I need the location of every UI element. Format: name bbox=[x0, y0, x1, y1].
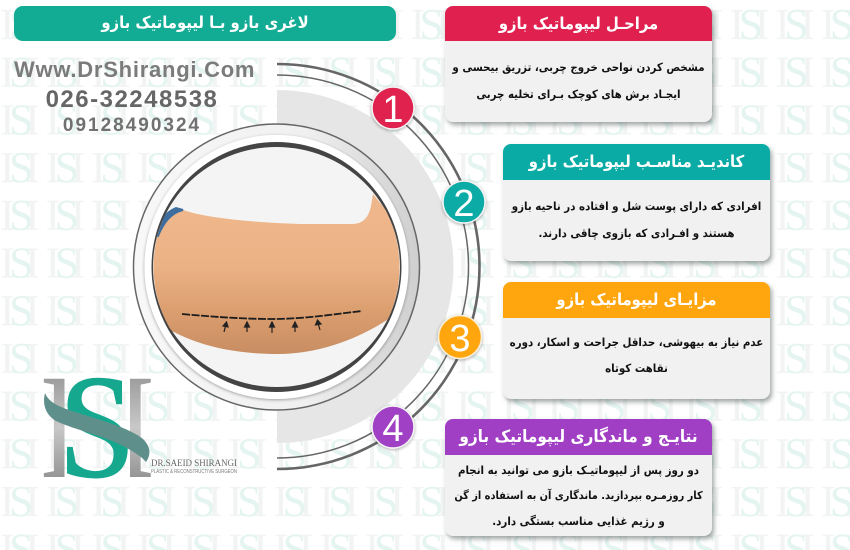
mobile phone: 09128490324 bbox=[63, 115, 201, 136]
grey half circle bbox=[277, 90, 453, 443]
logo bbox=[44, 378, 237, 478]
panel: step 4 bbox=[445, 419, 712, 536]
heading: step 4 bbox=[445, 419, 712, 455]
text: step 1 line 2: ایجـاد برش های کوچک بـرای تخلیه چربی bbox=[476, 87, 681, 101]
logo: I bbox=[40, 344, 79, 510]
badge 3 bbox=[438, 316, 482, 360]
small arrows bbox=[223, 320, 321, 333]
heading: step 2 bbox=[503, 144, 770, 180]
website address: Www.DrShirangi.Com bbox=[14, 57, 255, 82]
text: step 4 line 3: و رژیم غذایی مناسب بستگی دارد. bbox=[492, 514, 665, 528]
badge 4 bbox=[372, 406, 414, 450]
badge 1 bbox=[372, 87, 414, 131]
text: step 1 line 1: مشخص کردن نواحی خروج چربی، تزریق بیحسی و bbox=[452, 60, 705, 74]
logo: S bbox=[60, 343, 133, 510]
heading: step 3: مزایـای لیپوماتیک بازو bbox=[556, 290, 717, 309]
heading: step 2: کاندیـد مناسـب لیپوماتیک بازو bbox=[529, 152, 744, 171]
heading: step 1 bbox=[445, 6, 712, 41]
panel: step 1 bbox=[445, 6, 712, 122]
title bar bbox=[14, 6, 396, 41]
title bar: لاغری بازو بـا لیپوماتیک بازو bbox=[101, 13, 309, 32]
logo caption: DR.SAEID SHIRANGI bbox=[151, 459, 237, 469]
landline phone: 026-32248538 bbox=[46, 86, 218, 113]
heading: step 1: مراحـل لیپوماتیک بازو bbox=[499, 14, 658, 33]
badge 1: 1 bbox=[382, 89, 404, 131]
incision dashed line bbox=[182, 311, 362, 319]
text: step 2 line 1: افرادی که دارای پوست شل و افتاده در ناحیه بازو bbox=[512, 199, 761, 213]
heading: step 3 bbox=[503, 282, 770, 318]
badge 2 bbox=[443, 181, 485, 225]
heading: step 4: نتایـج و ماندگاری لیپوماتیک بازو bbox=[459, 427, 698, 447]
panel: step 3 bbox=[503, 282, 770, 399]
text: step 4 line 2: کار روزمـره بپردازید. ماندگاری آن به استفاده از گن bbox=[454, 489, 703, 502]
outer arcs bbox=[277, 64, 480, 469]
photo circle bbox=[134, 124, 420, 410]
text: step 2 line 2: هستند و افـرادی که بازوی چاقی دارند. bbox=[538, 226, 734, 240]
text: step 4 line 1: دو روز پس از لیپوماتیـک بازو می توانید به انجام bbox=[458, 463, 699, 477]
logo: PLASTIC & RECONSTRUCTIVE SURGEON bbox=[151, 469, 237, 475]
badge 2: 2 bbox=[453, 183, 475, 225]
panel: step 2 bbox=[503, 144, 770, 261]
text: step 3 line 2: نقاهت کوتاه bbox=[605, 361, 668, 375]
badge 3: 3 bbox=[449, 318, 471, 360]
text: step 3 line 1: عدم نیاز به بیهوشی، حداقل جراحت و اسکار، دوره bbox=[510, 335, 763, 349]
logo: I bbox=[115, 344, 155, 510]
photo: arm bbox=[145, 194, 410, 354]
badge 4: 4 bbox=[382, 408, 404, 450]
